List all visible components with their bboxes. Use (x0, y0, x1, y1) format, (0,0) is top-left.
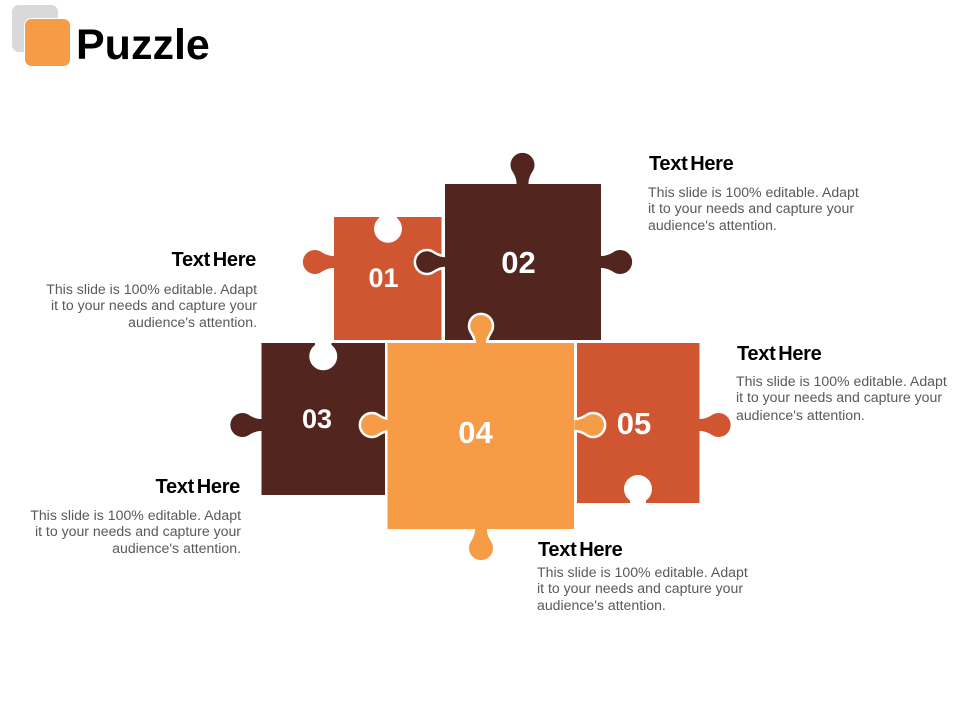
puzzle piece 04 (360, 314, 605, 560)
text block 02: Text Here (649, 153, 734, 175)
number 05: 05 (617, 406, 651, 441)
puzzle piece 01: 01 (368, 263, 399, 293)
text block 03: This slide is 100% editable. Adapt (30, 507, 241, 523)
text block 03: Text Here (156, 476, 240, 498)
icon: title badge (12, 5, 70, 66)
text block 04: audience's attention. (537, 597, 666, 613)
puzzle piece 01 (303, 216, 442, 340)
text block 05: audience's attention. (736, 407, 865, 423)
text block 01: Text Here (172, 249, 256, 271)
text block 02: it to your needs and capture your (648, 200, 854, 216)
text block 04: This slide is 100% editable. Adapt (537, 564, 748, 580)
text block 02: audience's attention. (648, 217, 777, 233)
text block 05: it to your needs and capture your (736, 389, 942, 405)
puzzle piece 02 (415, 153, 632, 340)
puzzle piece 03 (230, 342, 385, 495)
text block 04 (537, 539, 748, 613)
text block 01: This slide is 100% editable. Adapt (46, 281, 257, 297)
text block 05: Text Here (737, 343, 822, 365)
text block 03: it to your needs and capture your (35, 523, 241, 539)
title: Puzzle (76, 21, 210, 69)
text block 04: it to your needs and capture your (537, 580, 743, 596)
text block 04: Text Here (538, 539, 623, 561)
number 03: 03 (302, 404, 332, 434)
text block 01: it to your needs and capture your (51, 297, 257, 313)
text block 01 (46, 249, 257, 330)
puzzle piece 04: 04 (458, 415, 493, 450)
text block 01: audience's attention. (128, 314, 257, 330)
text block 05 (736, 343, 947, 423)
text block 02: This slide is 100% editable. Adapt (648, 184, 859, 200)
text block 03: audience's attention. (112, 540, 241, 556)
text block 03 (30, 476, 241, 556)
text block 02 (648, 153, 859, 233)
puzzle piece 02: 02 (501, 245, 536, 280)
puzzle piece 05 (577, 343, 731, 504)
text block 05: This slide is 100% editable. Adapt (736, 373, 947, 389)
